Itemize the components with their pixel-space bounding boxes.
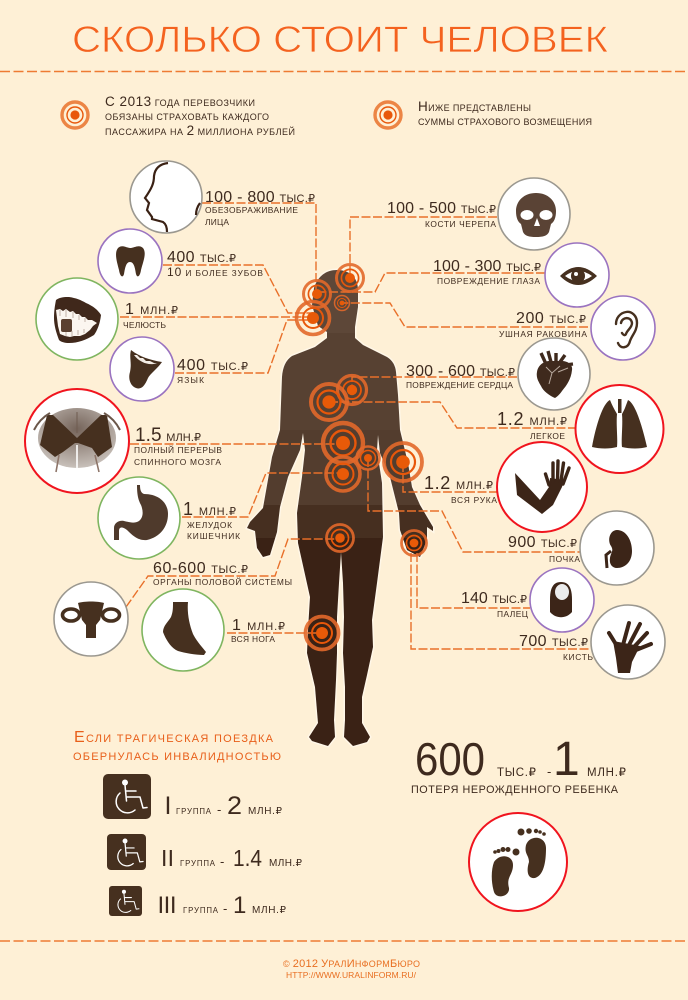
panel: finger <box>461 568 594 632</box>
unborn child amount <box>411 733 626 796</box>
panel: eye: 100 - 300 ТЫС.₽ <box>433 258 541 275</box>
panel: jaw <box>36 278 178 360</box>
target: leg <box>306 616 338 650</box>
target: spinal cord <box>323 423 363 463</box>
panel: face disfigurement <box>130 161 315 233</box>
disability group II: ГРУППА <box>180 859 216 868</box>
disability group III: 1 <box>233 892 246 919</box>
human body silhouette <box>240 265 440 753</box>
icon: eye <box>560 267 597 285</box>
disability group III <box>109 886 287 919</box>
panel: hand <box>519 605 665 679</box>
icon: skull <box>516 193 556 237</box>
intro note: amounts: НИЖЕ ПРЕДСТАВЛЕНЫ <box>418 99 531 114</box>
disability group III: - <box>223 901 227 916</box>
icon: head profile <box>145 163 200 232</box>
icon: target bullet <box>375 102 401 128</box>
target: heart <box>338 376 366 404</box>
panel: spinal cord <box>25 389 222 493</box>
connector: face <box>202 203 316 292</box>
disability group II: 1.4 <box>233 845 262 871</box>
panel: lung: ЛЕГКОЕ <box>530 431 565 441</box>
icon: heart <box>537 351 573 398</box>
icon: ear <box>616 312 637 347</box>
panel: baby feet <box>469 813 567 911</box>
icon: lungs <box>592 399 647 448</box>
footer credits: HTTP://WWW.URALINFORM.RU/ <box>286 970 417 980</box>
panel: jaw: 1 МЛН.₽ <box>125 301 178 318</box>
panel: face disfigurement: ЛИЦА <box>205 217 229 227</box>
panel: teeth: 400 ТЫС.₽ <box>167 249 236 266</box>
icon: finger with nail <box>550 582 572 617</box>
connector: tooth <box>163 265 313 313</box>
panel: jaw: ЧЕЛЮСТЬ <box>123 320 166 330</box>
panel: ear: УШНАЯ РАКОВИНА <box>499 329 587 339</box>
icon: kidney <box>606 530 632 568</box>
intro note: carriers <box>62 94 295 138</box>
target: jaw <box>296 302 330 334</box>
panel: hand: 700 ТЫС.₽ <box>519 633 588 650</box>
icon: tongue <box>129 350 162 388</box>
icon: open hand <box>609 623 651 673</box>
disability group III: III <box>158 892 176 919</box>
heading: disability: ОБЕРНУЛАСЬ ИНВАЛИДНОСТЬЮ <box>73 751 281 763</box>
disability group II <box>107 834 303 871</box>
intro note: carriers: ПАССАЖИРА НА 2 МИЛЛИОНА РУБЛЕЙ <box>105 123 295 138</box>
unborn child amount: 600 <box>415 733 485 785</box>
target: lung <box>311 384 347 420</box>
panel: kidney: ПОЧКА <box>549 554 580 564</box>
unborn child amount: ПОТЕРЯ НЕРОЖДЕННОГО РЕБЕНКА <box>411 784 619 796</box>
target: hand <box>402 530 426 556</box>
disability group II: - <box>220 854 224 869</box>
panel: arm: 1.2 МЛН.₽ <box>424 473 493 493</box>
panel: kidney <box>508 511 654 585</box>
connector: eye <box>317 273 545 292</box>
panel: kidney: 900 ТЫС.₽ <box>508 534 577 551</box>
panel: arm: ВСЯ РУКА <box>451 495 497 505</box>
panel: skull: КОСТИ ЧЕРЕПА <box>425 219 496 229</box>
panel: face disfigurement: ОБЕЗОБРАЖИВАНИЕ <box>205 205 298 215</box>
disability group II: II <box>161 845 174 871</box>
heading: disability <box>73 729 281 763</box>
panel: ear: 200 ТЫС.₽ <box>516 310 586 327</box>
panel: stomach: ЖЕЛУДОК <box>187 520 232 530</box>
icon: jaws with teeth <box>54 297 101 343</box>
panel: skull <box>387 178 570 250</box>
panel: spinal cord: ПОЛНЫЙ ПЕРЕРЫВ <box>134 444 222 455</box>
target: arm <box>384 443 422 481</box>
connector: reproductive organs <box>126 539 340 607</box>
panel: reproductive organs: ОРГАНЫ ПОЛОВОЙ СИСТЕМЫ <box>153 576 292 587</box>
connector: spinal cord <box>130 443 342 445</box>
connector: jaw <box>120 316 313 318</box>
target: kidney <box>356 446 380 470</box>
intro note: amounts: СУММЫ СТРАХОВОГО ВОЗМЕЩЕНИЯ <box>418 117 592 127</box>
panel: skull: 100 - 500 ТЫС.₽ <box>387 200 496 217</box>
disability group I: 2 <box>227 792 242 820</box>
disability group I: ГРУППА <box>176 807 212 816</box>
panel: face disfigurement: 100 - 800 ТЫС.₽ <box>205 189 315 206</box>
icon: arm <box>515 461 569 514</box>
panel: stomach: 1 МЛН.₽ <box>183 499 236 519</box>
connector: heart <box>352 377 517 390</box>
panel: finger: ПАЛЕЦ <box>497 609 529 619</box>
icon: footprints <box>492 828 546 896</box>
unborn child amount: 1 <box>553 733 580 786</box>
connector: arm <box>403 463 497 492</box>
disability group III: ГРУППА <box>183 906 219 915</box>
icon: stomach <box>114 485 168 540</box>
connector: skull <box>350 217 497 278</box>
target: stomach <box>326 457 360 491</box>
panel: heart: 300 - 600 ТЫС.₽ <box>406 363 515 380</box>
footer credits <box>283 958 420 980</box>
disability group I: МЛН.₽ <box>248 806 283 817</box>
disability group I: - <box>217 802 221 817</box>
unborn child amount: - <box>547 764 551 779</box>
target: face <box>304 280 330 308</box>
target: reproductive organs <box>326 524 354 552</box>
connector: tongue <box>175 320 313 373</box>
target: skull <box>336 264 364 292</box>
target rings on body <box>296 264 426 650</box>
heading: disability: ЕСЛИ ТРАГИЧЕСКАЯ ПОЕЗДКА <box>74 729 274 746</box>
title: СКОЛЬКО СТОИТ ЧЕЛОВЕК <box>72 18 608 60</box>
panel: teeth: 10 И БОЛЕЕ ЗУБОВ <box>167 265 263 279</box>
panel: tongue <box>110 337 248 401</box>
connector: leg <box>227 632 322 634</box>
panel: arm <box>424 442 587 532</box>
intro note: amounts <box>375 99 592 128</box>
panel: hand: КИСТЬ <box>563 652 594 662</box>
icon: target bullet <box>62 102 88 128</box>
connector: finger <box>417 553 530 608</box>
panel: finger: 140 ТЫС.₽ <box>461 590 527 607</box>
panel: eye <box>433 243 609 307</box>
panel: ear <box>499 296 655 360</box>
panel: spinal cord: 1.5 МЛН.₽ <box>135 425 201 446</box>
connector: hand <box>411 553 592 649</box>
icon: foot <box>163 602 206 655</box>
disability group II: МЛН.₽ <box>269 858 303 869</box>
icon: wheelchair <box>103 774 151 819</box>
connector: kidney <box>368 458 580 552</box>
disability group I <box>103 774 283 820</box>
panel: heart: ПОВРЕЖДЕНИЕ СЕРДЦА <box>406 380 513 390</box>
panel: reproductive organs <box>54 560 292 656</box>
icon: wheelchair <box>107 834 146 870</box>
panel: eye: ПОВРЕЖДЕНИЕ ГЛАЗА <box>437 276 540 286</box>
disability group III: МЛН.₽ <box>252 905 287 916</box>
panel: stomach <box>98 477 240 559</box>
disability group I: I <box>164 792 171 820</box>
panel: reproductive organs: 60-600 ТЫС.₽ <box>153 560 248 577</box>
panel: lung <box>497 385 664 473</box>
connector: stomach <box>182 473 343 517</box>
panel: spinal cord: СПИННОГО МОЗГА <box>134 457 221 467</box>
icon: tooth <box>116 246 145 276</box>
unborn child amount: МЛН.₽ <box>587 767 626 779</box>
icon: uterus <box>62 602 120 638</box>
panel: leg: 1 МЛН.₽ <box>232 617 285 634</box>
icon: spinal cord section <box>34 408 120 472</box>
icon: wheelchair <box>109 886 142 916</box>
panel: leg: ВСЯ НОГА <box>231 634 275 644</box>
target: eye <box>334 296 350 310</box>
intro note: carriers: С 2013 ГОДА ПЕРЕВОЗЧИКИ <box>105 94 255 109</box>
panel: leg <box>142 589 285 671</box>
panel: lung: 1.2 МЛН.₽ <box>497 409 567 429</box>
footer credits: © 2012 УРАЛИНФОРМБЮРО <box>283 958 420 970</box>
panel: teeth <box>98 229 263 293</box>
connector: ear <box>342 303 588 327</box>
panel: tongue: 400 ТЫС.₽ <box>177 357 248 374</box>
connector: lung <box>329 402 575 428</box>
panel: heart <box>406 338 590 410</box>
intro note: carriers: ОБЯЗАНЫ СТРАХОВАТЬ КАЖДОГО <box>105 112 269 122</box>
panel: tongue: ЯЗЫК <box>177 375 204 385</box>
panel: stomach: КИШЕЧНИК <box>187 531 240 541</box>
unborn child amount: ТЫС.₽ <box>497 767 536 779</box>
